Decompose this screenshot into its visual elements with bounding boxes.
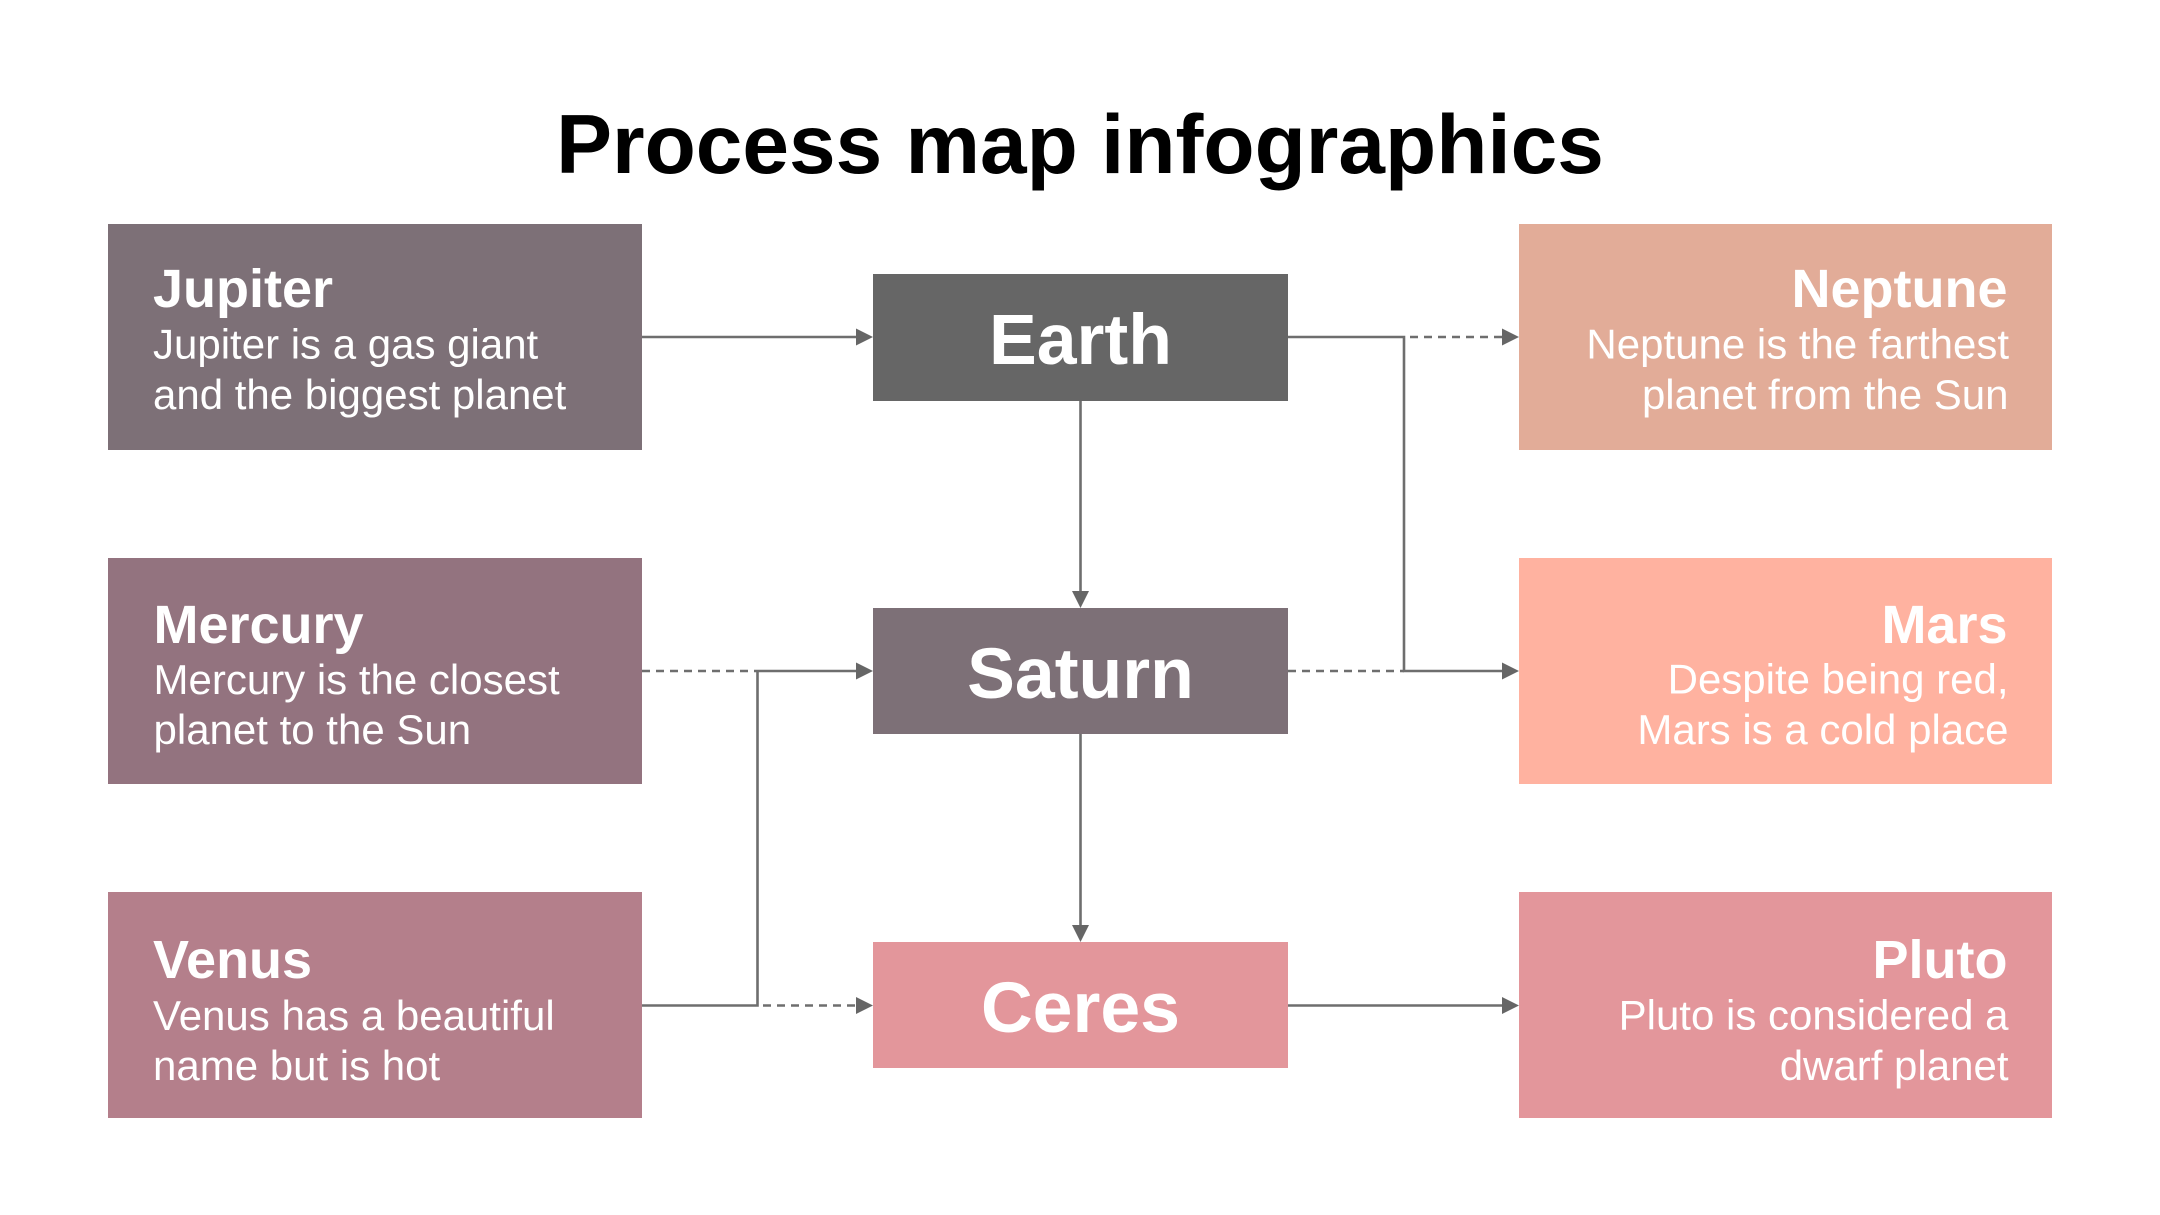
arrow: Jupiter to Earth [642,328,873,346]
panel: Saturn [873,608,1288,734]
heading: Venus: Venus [153,930,312,990]
text block: Jupiter description: and the biggest planet [153,371,567,418]
arrow: Earth to Saturn [1072,401,1089,608]
heading: Saturn: Saturn [967,634,1194,714]
panel: Venus [108,892,642,1118]
panel: Ceres [873,942,1288,1068]
arrow: Mercury to Saturn [642,662,873,680]
heading: Neptune: Neptune [1792,259,2008,319]
arrow: Venus to Saturn and Ceres [642,671,873,1014]
text block: Jupiter description: Jupiter is a gas giant [153,320,539,368]
heading: Jupiter: Jupiter [153,259,333,319]
panel: Pluto [1519,892,2052,1118]
heading: Earth: Earth [989,300,1172,380]
panel: Jupiter [108,224,642,450]
panel: Neptune [1519,224,2052,450]
arrow: Saturn to Ceres [1072,734,1089,942]
text block: Mars description: Mars is a cold place [1637,706,2008,753]
text block: Neptune description: Neptune is the farthest [1586,320,2009,368]
heading: Pluto: Pluto [1873,930,2008,990]
text block: Neptune description: planet from the Sun [1642,371,2008,418]
arrow: Ceres to Pluto [1288,997,1519,1014]
text block: Venus description: Venus has a beautiful [153,992,555,1039]
heading: Ceres: Ceres [981,968,1180,1048]
text block: Pluto description: dwarf planet [1780,1042,2009,1089]
text block: Mercury description: Mercury is the closest [154,656,560,703]
title: Process map infographics [556,97,1604,191]
heading: Mercury: Mercury [154,595,364,655]
panel: Mercury [108,558,642,784]
text block: Mars description: Despite being red, [1668,656,2008,702]
text block: Pluto description: Pluto is considered a [1619,992,2009,1038]
text block: Mercury description: planet to the Sun [154,706,471,753]
arrow: Saturn to Mars [1288,670,1404,672]
heading: Mars: Mars [1881,595,2008,655]
panel: Earth [873,274,1288,401]
panel: Mars [1519,558,2052,784]
text block: Venus description: name but is hot [153,1042,441,1089]
arrow: Earth to Neptune and Mars [1288,328,1519,680]
